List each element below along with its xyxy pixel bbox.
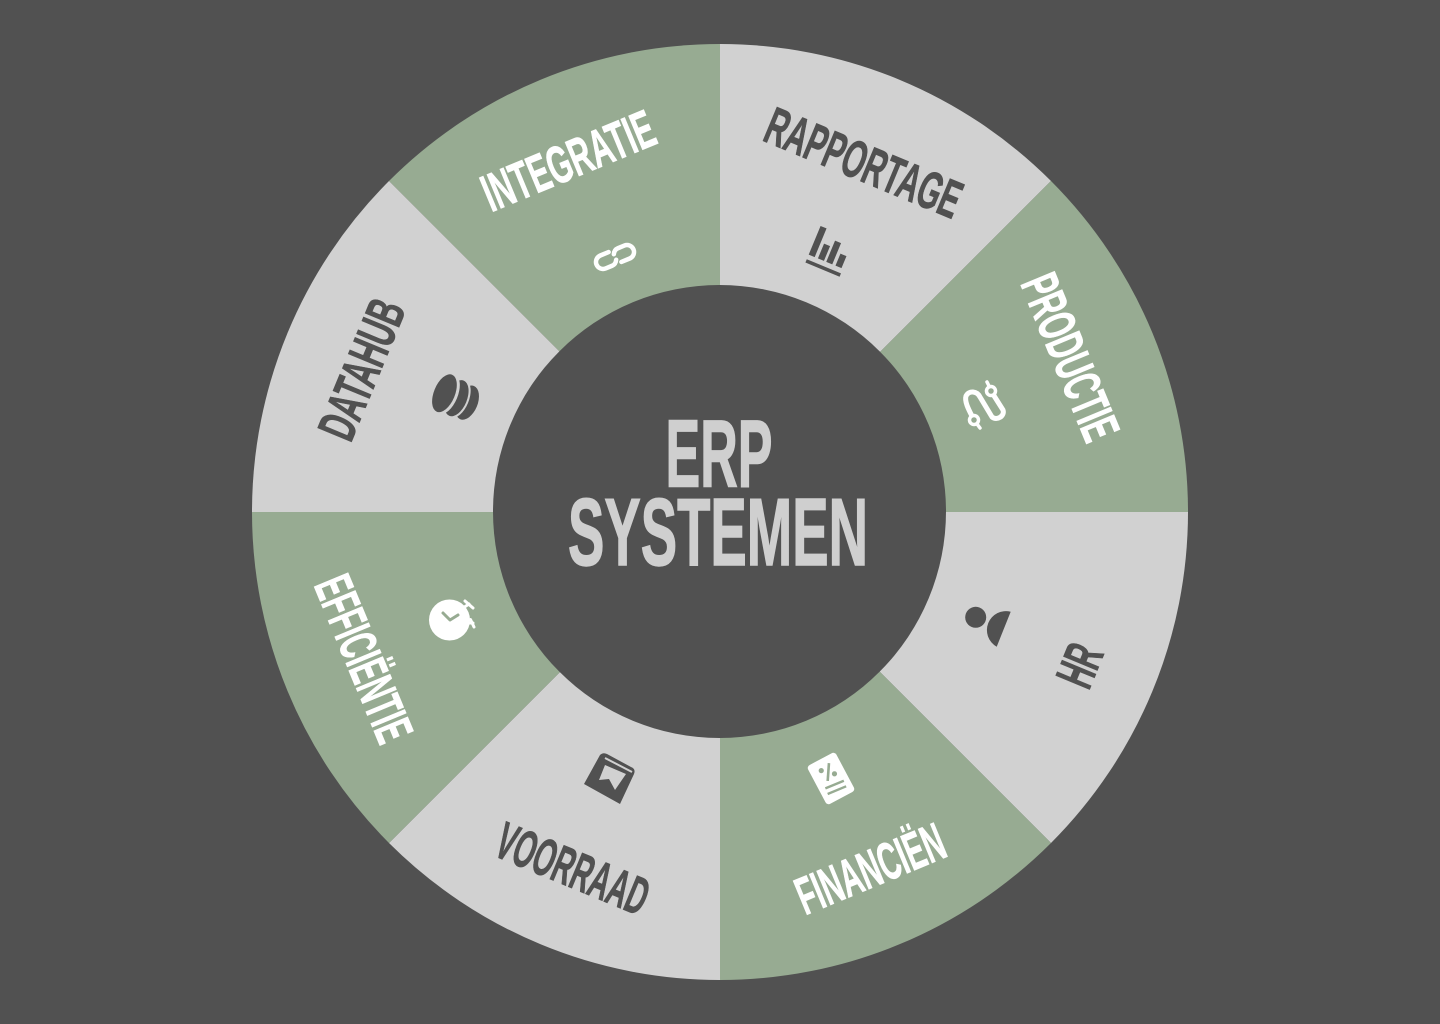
segment: voorraad — [389, 512, 720, 980]
segment: datahub — [252, 181, 720, 512]
title — [568, 400, 868, 586]
label: hr: HR — [1045, 635, 1115, 696]
center circle — [493, 285, 946, 738]
segment: financien — [720, 512, 1051, 980]
label: efficientie: EFFICIËNTIE — [302, 567, 424, 751]
title: SYSTEMEN — [568, 479, 868, 586]
label: rapportage: RAPPORTAGE — [757, 97, 970, 230]
label: integratie: INTEGRATIE — [473, 99, 664, 223]
title: ERP — [666, 400, 772, 508]
segment: productie — [720, 181, 1188, 512]
label: voorraad: VOORRAAD — [487, 812, 658, 927]
segment: efficientie — [252, 512, 720, 843]
icon: stopwatch — [429, 600, 474, 640]
segment: hr — [720, 512, 1188, 843]
icon: invoice — [807, 752, 855, 805]
segment: rapportage — [720, 44, 1051, 512]
segment: integratie — [389, 44, 720, 512]
icon: bar chart — [805, 226, 855, 277]
icon: production line — [966, 382, 1003, 428]
label: datahub: DATAHUB — [307, 291, 418, 448]
icon: database — [427, 370, 485, 426]
label: financien: FINANCIËN — [787, 812, 954, 926]
icon: book — [584, 753, 635, 804]
icon: link — [594, 243, 636, 271]
label: productie: PRODUCTIE — [1009, 265, 1130, 450]
icon: person — [965, 607, 1011, 647]
